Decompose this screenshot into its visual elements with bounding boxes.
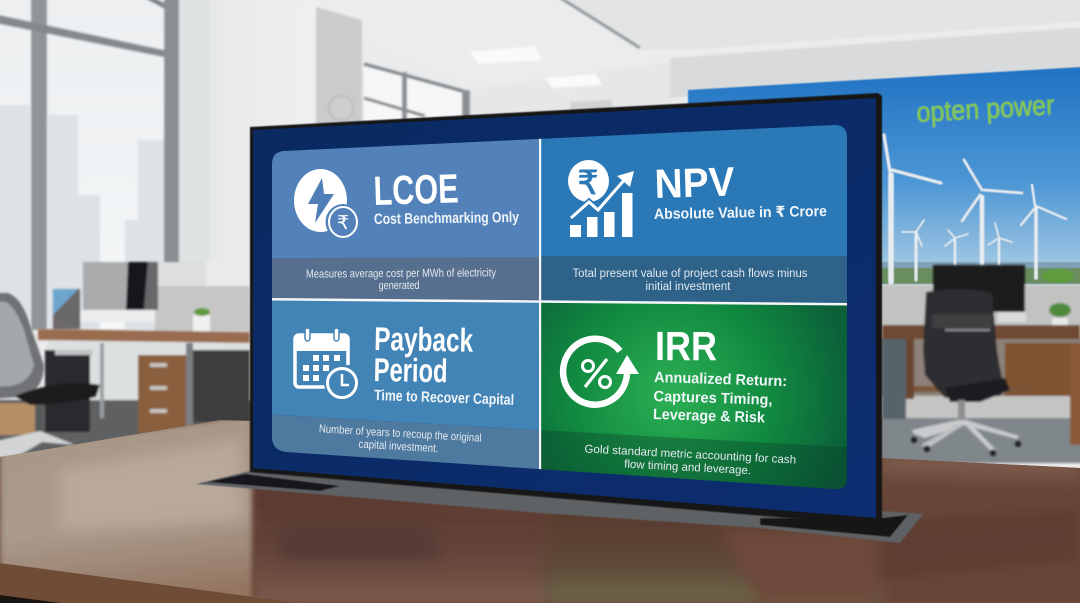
quadrant: NPV [540, 122, 860, 256]
heading: Payback Period: Payback [374, 320, 474, 359]
wind turbine banner: opten power [916, 89, 1055, 128]
distant city buildings [0, 105, 165, 330]
quadrant: IRR caption band [541, 430, 847, 489]
caption: NPV: initial investment [646, 281, 731, 293]
quadrant: NPV caption band [540, 256, 860, 305]
subheading: IRR: Leverage & Risk [653, 406, 766, 427]
card: LCOE [294, 165, 520, 293]
left chair [0, 293, 44, 400]
caption: Payback Period: capital investment. [358, 439, 439, 455]
caption: IRR: flow timing and leverage. [624, 459, 751, 477]
caption: Payback Period: Number of years to recoup the original [319, 423, 482, 445]
heading: Payback Period: Period [373, 351, 448, 389]
caption: LCOE: generated [379, 280, 420, 292]
subheading: IRR: Annualized Return: [654, 369, 787, 390]
monitor left [83, 262, 158, 310]
heading: NPV: NPV [654, 158, 736, 207]
heading: LCOE: LCOE [373, 165, 459, 214]
subheading: LCOE: Cost Benchmarking Only [374, 209, 520, 228]
wooden table [0, 410, 1080, 603]
quadrant: LCOE caption band [260, 257, 540, 300]
quadrant: LCOE [260, 137, 540, 258]
dashboard panel [260, 122, 860, 495]
heading: IRR: IRR [655, 323, 717, 369]
subheading: NPV: Absolute Value in ₹ Crore [654, 203, 827, 223]
right workstation [880, 265, 1080, 463]
card: IRR [563, 323, 796, 480]
quadrant: Payback [260, 299, 540, 430]
caption: NPV: Total present value of project cash flows minus [572, 268, 808, 280]
left workstation [0, 262, 260, 460]
icon: rupee growth chart [568, 160, 634, 237]
caption: LCOE: Measures average cost per MWh of electricity [306, 267, 496, 281]
icon: bolt with rupee coin: ₹ [337, 213, 349, 234]
monitor frame [250, 93, 882, 526]
subheading: IRR: Captures Timing, [653, 388, 773, 409]
caption: IRR: Gold standard metric accounting for cash [584, 443, 796, 467]
right chair [923, 289, 1005, 398]
card: Payback Period [295, 320, 514, 458]
monitor base slot [196, 471, 923, 543]
table edge front [0, 563, 300, 603]
divider: horizontal [272, 298, 847, 306]
quadrant: IRR [540, 301, 860, 495]
card: NPV [568, 158, 827, 293]
monitor screen bezel [253, 98, 876, 518]
divider: vertical [539, 130, 541, 475]
icon: bolt with rupee coin [294, 169, 360, 240]
icon: rupee growth chart: ₹ [578, 164, 598, 201]
icon: percent return cycle [563, 339, 639, 405]
icon: calendar with clock [295, 328, 360, 401]
subheading: Payback Period: Time to Recover Capital [374, 387, 514, 409]
quadrant: Payback caption band [260, 414, 540, 470]
wind turbine banner [688, 66, 1080, 285]
